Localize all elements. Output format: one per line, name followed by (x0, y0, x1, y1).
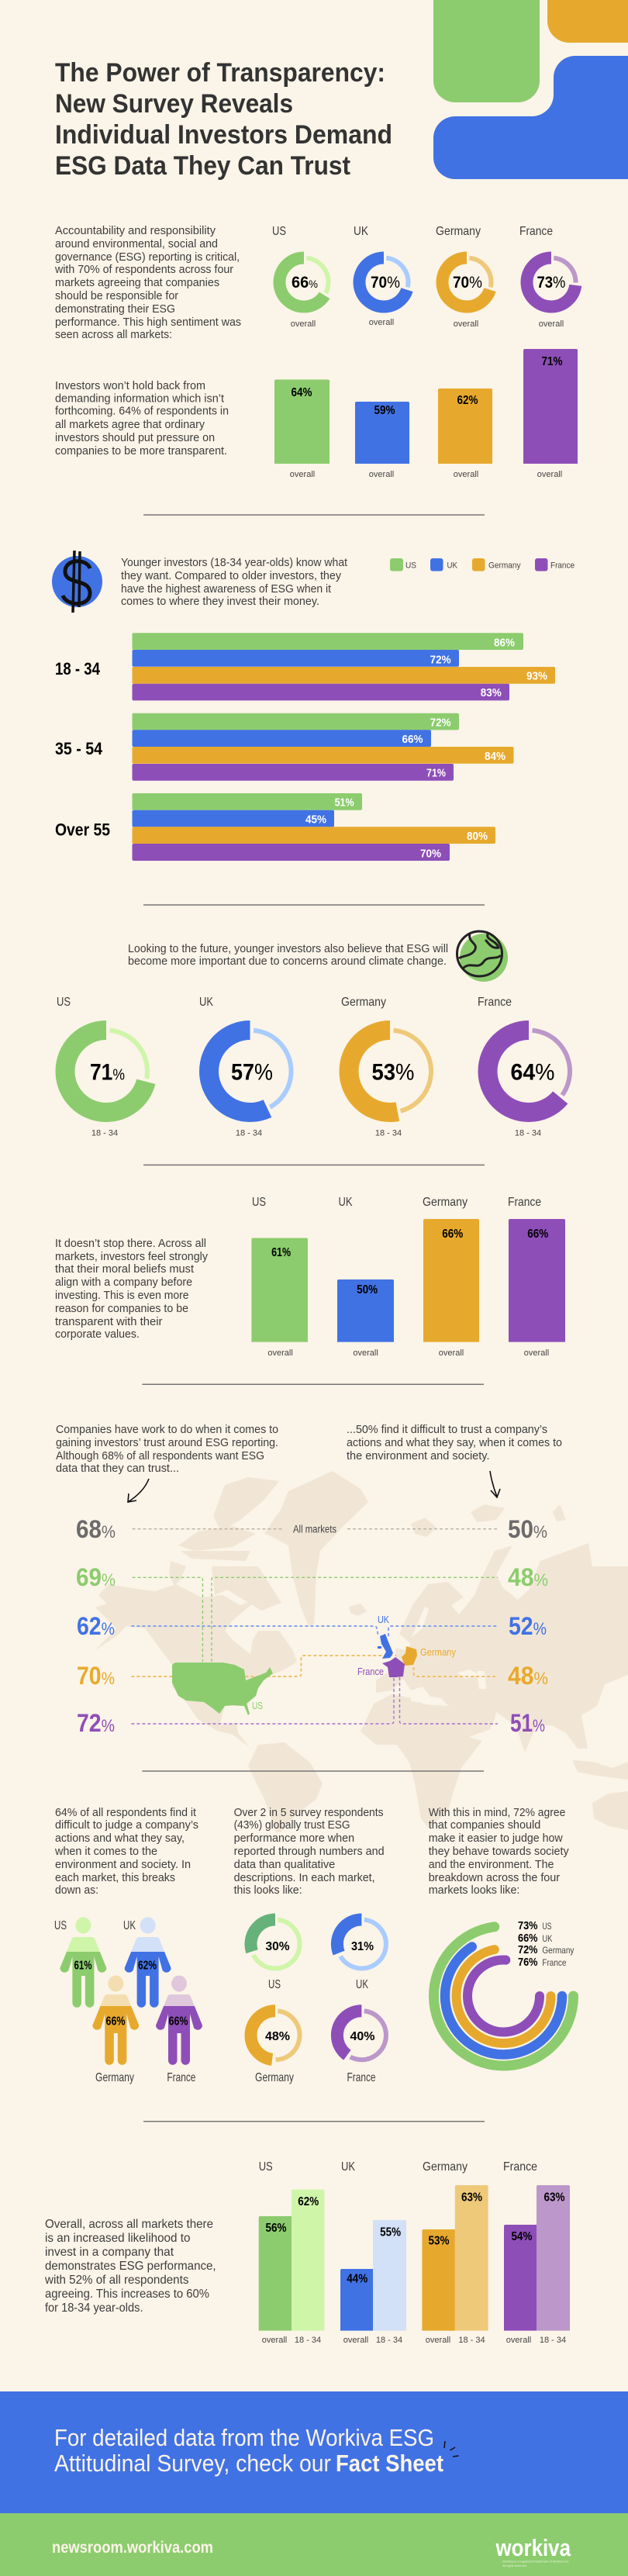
text block: likelihood to invest (44, 2218, 216, 2315)
text block: accountability: with 70% of respondents across four (54, 263, 233, 276)
text block: difficult to judge: difficult to judge a company’s (55, 1818, 198, 1832)
text block: younger investors: have the highest awareness of ESG when it (121, 582, 332, 596)
text block: accountability (54, 224, 241, 341)
icon: globe (457, 931, 508, 982)
bar chart: investors should put pressure on companies: 62% (457, 394, 478, 407)
bar chart: investors should put pressure on companies: overall (369, 470, 394, 479)
bar chart: awareness 18-34: 18 - 34 (55, 659, 101, 679)
people pictogram chart: US (54, 1919, 67, 1932)
radial bar chart: easier to judge: France (542, 1957, 567, 1968)
bar chart: moral beliefs (251, 1196, 565, 1358)
radial bar chart: easier to judge: UK (542, 1933, 552, 1944)
text block: moral beliefs: align with a company before (55, 1276, 192, 1289)
donut charts: overall responsibility: UK (354, 225, 368, 238)
text block: accountability: should be responsible for (55, 289, 178, 302)
bar chart: moral beliefs: France (508, 1196, 541, 1209)
legend: UK (447, 561, 458, 571)
text block: likelihood to invest: invest in a company that (45, 2246, 174, 2259)
text block: numbers and data: data than qualitative (234, 1858, 335, 1871)
text block: investors won't hold back: Investors won’t hold back from (55, 379, 205, 392)
text block: moral beliefs: It doesn’t stop there. Across all (55, 1237, 206, 1250)
call to action band: Attitudinal Survey, check our (54, 2450, 331, 2477)
percent column: want data they can trust (76, 1515, 116, 1737)
text block: numbers and data: this looks like: (234, 1884, 302, 1897)
footer band: newsroom.workiva.com (52, 2539, 213, 2557)
text block: younger investors: comes to where they invest their money. (121, 595, 319, 608)
text block: trust right: the environment and society. (347, 1449, 490, 1462)
bar chart: investors should put pressure on companies: overall (537, 470, 562, 479)
people pictogram chart: 66% (105, 2015, 126, 2029)
donut charts: 18-34 ESG importance: US (57, 996, 71, 1009)
people pictogram chart: Germany (95, 2071, 134, 2084)
bar chart: moral beliefs: overall (353, 1348, 378, 1358)
text block: accountability: seen across all markets: (55, 328, 172, 341)
text block: moral beliefs: that their moral beliefs must (55, 1262, 195, 1276)
text block: likelihood to invest: Overall, across all markets there (45, 2218, 213, 2231)
text block: likelihood to invest: is an increased likelihood to (45, 2232, 191, 2245)
text block: difficult to judge: down as: (55, 1884, 98, 1897)
donut charts: trust numbers and data (248, 1917, 388, 2084)
map connector lines (131, 1529, 498, 1724)
donut charts: overall responsibility: France (519, 225, 553, 238)
text block: numbers and data: performance more when (234, 1832, 354, 1845)
donut charts: overall responsibility (272, 225, 578, 329)
bar chart: awareness over 55: 51% (335, 796, 354, 810)
bar chart: likelihood to invest: overall (426, 2336, 450, 2345)
donut charts: trust numbers and data: Germany (255, 2071, 294, 2084)
text block: easier to judge: they behave towards society (429, 1845, 569, 1858)
text block: younger investors (121, 556, 348, 608)
donut charts: overall responsibility: overall (291, 319, 316, 329)
donut charts: 18-34 ESG importance: 71% (90, 1059, 125, 1086)
footer band: workiva (495, 2534, 571, 2561)
bar chart: moral beliefs: overall (267, 1348, 293, 1358)
map: US: US (252, 1700, 263, 1711)
text block: moral beliefs: transparent with their (55, 1315, 163, 1328)
text block: easier to judge: that companies should (429, 1818, 540, 1832)
radial bar chart: easier to judge: 66% (518, 1932, 538, 1945)
donut charts: trust numbers and data: France (347, 2071, 376, 2084)
people pictogram chart: France (167, 2071, 195, 2084)
bar chart: awareness 18-34: 86% (494, 636, 515, 650)
donut charts: overall responsibility: overall (539, 319, 564, 329)
percent column: want data they can trust: 69% (76, 1563, 116, 1591)
bar chart: awareness over 55 (55, 793, 495, 861)
bar chart: investors should put pressure on companies: 59% (374, 404, 395, 417)
call to action band: For detailed data from the Workiva ESG (54, 2424, 434, 2451)
legend: Germany (488, 561, 521, 571)
bar chart: likelihood to invest: overall (343, 2336, 368, 2345)
text block: easier to judge: With this in mind, 72% agree (429, 1806, 565, 1819)
percent column: want data they can trust: 62% (77, 1612, 115, 1640)
donut charts: trust numbers and data: 30% (265, 1940, 290, 1953)
text block: accountability: governance (ESG) reporting is critical, (55, 250, 240, 264)
text block: looking to the future: become more important due to concerns around climate change. (128, 955, 447, 968)
donut charts: 18-34 ESG importance (57, 996, 573, 1138)
text block: easier to judge: markets looks like: (429, 1884, 519, 1897)
percent column: difficult to trust (508, 1515, 548, 1737)
bar chart: likelihood to invest: UK (341, 2160, 355, 2174)
text block: trust left: data that they can trust... (56, 1462, 179, 1475)
call to action band (0, 2391, 628, 2513)
bar chart: awareness 35-54: 35 - 54 (55, 739, 103, 758)
donut charts: overall responsibility: US (272, 225, 286, 238)
bar chart: moral beliefs: overall (524, 1348, 549, 1358)
bar chart: likelihood to invest: 18 - 34 (540, 2336, 566, 2345)
text block: moral beliefs: reason for companies to be (55, 1302, 188, 1315)
text block: easier to judge: breakdown across the four (429, 1871, 560, 1884)
bar chart: likelihood to invest: overall (506, 2336, 531, 2345)
bar chart: investors should put pressure on companies: 71% (541, 355, 563, 368)
donut charts: 18-34 ESG importance: 18 - 34 (236, 1129, 262, 1138)
radial bar chart: easier to judge (434, 1919, 574, 2066)
donut charts: 18-34 ESG importance: Germany (341, 996, 386, 1009)
text block: investors won't hold back: demanding information which isn’t (55, 392, 225, 405)
percent column: want data they can trust: 72% (77, 1709, 115, 1737)
text block: numbers and data (234, 1806, 385, 1897)
bar chart: likelihood to invest: 63% (544, 2191, 564, 2204)
legend: France (550, 561, 575, 571)
bar chart: likelihood to invest: 56% (265, 2222, 287, 2235)
donut charts: trust numbers and data: US (268, 1978, 281, 1991)
text block: easier to judge: and the environment. The (429, 1858, 554, 1871)
donut charts: 18-34 ESG importance: 18 - 34 (515, 1129, 541, 1138)
bar chart: investors should put pressure on companies: overall (454, 470, 478, 479)
donut charts: 18-34 ESG importance: 18 - 34 (91, 1129, 118, 1138)
title: ESG Data They Can Trust (55, 151, 350, 181)
icon: dollar coin (52, 551, 102, 613)
donut charts: 18-34 ESG importance: UK (199, 996, 213, 1009)
text block: likelihood to invest: for 18-34 year-olds. (45, 2301, 143, 2315)
text block: accountability: demonstrating their ESG (55, 302, 175, 316)
title: Individual Investors Demand (55, 120, 392, 150)
footer band (0, 2513, 628, 2576)
bar chart: awareness 35-54: 71% (426, 766, 446, 780)
map: Germany (402, 1646, 456, 1666)
text block: likelihood to invest: agreeing. This increases to 60% (45, 2288, 209, 2301)
bar chart: likelihood to invest: 54% (512, 2230, 532, 2243)
bar chart: investors should put pressure on companies (274, 349, 578, 479)
legend: US (405, 561, 416, 571)
donut charts: 18-34 ESG importance: 57% (231, 1059, 273, 1086)
text block: investors won't hold back: investors should put pressure on (55, 431, 215, 444)
text block: trust left: gaining investors’ trust around ESG reporting. (56, 1436, 278, 1449)
radial bar chart: easier to judge: US (542, 1921, 551, 1932)
percent column: difficult to trust: 48% (508, 1662, 548, 1690)
text block: difficult to judge: each market, this breaks (55, 1871, 175, 1884)
label: all markets: All markets (293, 1523, 336, 1535)
title (55, 58, 392, 181)
text block: investors won't hold back: companies to be more transparent. (55, 444, 227, 458)
bar chart: awareness over 55: 80% (467, 830, 488, 843)
donut charts: overall responsibility: 66% (292, 274, 318, 292)
text block: numbers and data: Over 2 in 5 survey respondents (234, 1806, 384, 1819)
bar chart: likelihood to invest: 18 - 34 (295, 2336, 321, 2345)
map: Germany: Germany (420, 1646, 456, 1658)
bar chart: awareness 35-54 (55, 713, 513, 781)
map: UK: UK (378, 1614, 389, 1625)
donut charts: overall responsibility: overall (454, 319, 478, 329)
percent column: want data they can trust: 70% (77, 1662, 115, 1690)
donut charts: trust numbers and data: UK (356, 1978, 368, 1991)
donut charts: overall responsibility: overall (369, 318, 394, 327)
bar chart: likelihood to invest: US (259, 2160, 273, 2174)
bar chart: moral beliefs: UK (338, 1196, 353, 1209)
text block: accountability: Accountability and responsibility (55, 224, 216, 237)
text block: younger investors: Younger investors (18-34 year-olds) know what (121, 556, 348, 569)
text block: difficult to judge: environment and society. In (55, 1858, 191, 1871)
percent column: difficult to trust: 51% (510, 1709, 545, 1737)
text block: trust left: Although 68% of all respondents want ESG (56, 1449, 264, 1462)
arrow: left (128, 1479, 149, 1502)
bar chart: likelihood to invest: France (503, 2160, 537, 2174)
bar chart: likelihood to invest: 18 - 34 (458, 2336, 485, 2345)
bar chart: awareness over 55: Over 55 (55, 820, 110, 839)
text block: numbers and data: reported through numbers and (234, 1845, 385, 1858)
text block: trust right: ...50% find it difficult to trust a company’s (347, 1423, 547, 1436)
text block: likelihood to invest: with 52% of all respondents (44, 2274, 188, 2287)
percent column: difficult to trust: 52% (509, 1612, 547, 1640)
bar chart: awareness 18-34: 83% (481, 686, 502, 699)
text block: moral beliefs: corporate values. (55, 1328, 140, 1341)
radial bar chart: easier to judge: Germany (542, 1945, 574, 1956)
map: France (357, 1657, 405, 1677)
people pictogram chart: UK (123, 1919, 136, 1932)
text block: moral beliefs (55, 1237, 208, 1341)
text block: accountability: performance. This high sentiment was (55, 316, 241, 329)
donut charts: trust numbers and data: 31% (351, 1940, 374, 1953)
text block: easier to judge: make it easier to judge how (429, 1832, 563, 1845)
text block: trust left (56, 1423, 278, 1475)
bar chart: moral beliefs: overall (439, 1348, 464, 1358)
text block: looking to the future: Looking to the future, younger investors also believe that ESG will (128, 942, 448, 955)
donut charts: trust numbers and data: 40% (350, 2030, 375, 2043)
radial bar chart: easier to judge: 76% (518, 1956, 538, 1969)
text block: investors won't hold back: forthcoming. 64% of respondents in (55, 405, 229, 417)
people pictogram chart: 66% (169, 2015, 188, 2029)
donut charts: overall responsibility: 70% (371, 274, 400, 292)
bar chart: awareness over 55: 70% (420, 847, 441, 861)
bar chart: awareness 35-54: 66% (402, 733, 423, 746)
bar chart: likelihood to invest (259, 2160, 570, 2345)
bar chart: moral beliefs: US (252, 1196, 266, 1209)
text block: trust left: Companies have work to do when it comes to (56, 1423, 278, 1436)
footer band: All rights reserved. (502, 2564, 527, 2567)
bar chart: moral beliefs: 66% (442, 1228, 463, 1241)
title: New Survey Reveals (55, 89, 293, 119)
bar chart: moral beliefs: 50% (357, 1283, 378, 1297)
arrow: right (490, 1471, 500, 1497)
bar chart: likelihood to invest: 63% (461, 2191, 482, 2204)
bar chart: likelihood to invest: 62% (298, 2195, 319, 2208)
bar chart: awareness 18-34 (55, 633, 555, 700)
world map background (95, 1471, 628, 1832)
bar chart: awareness 35-54: 84% (485, 750, 506, 763)
bar chart: likelihood to invest: 53% (428, 2235, 450, 2247)
text block: numbers and data: (43%) globally trust ESG (234, 1818, 350, 1832)
people pictogram chart: 61% (74, 1959, 91, 1973)
donut charts: overall responsibility: 70% (453, 274, 482, 292)
donut charts: 18-34 ESG importance: 18 - 34 (375, 1129, 402, 1138)
donut charts: overall responsibility: Germany (436, 225, 481, 238)
text block: easier to judge (429, 1806, 569, 1897)
bar chart: moral beliefs: Germany (423, 1196, 468, 1209)
text block: difficult to judge: 64% of all respondents find it (55, 1806, 197, 1819)
text block: accountability: markets agreeing that companies (55, 276, 219, 289)
percent column: difficult to trust: 50% (508, 1515, 547, 1543)
bar chart: likelihood to invest: 44% (347, 2272, 367, 2286)
text block: younger investors: they want. Compared to older investors, they (121, 569, 341, 582)
map: US (172, 1663, 273, 1715)
people pictogram chart: 62% (138, 1959, 157, 1973)
text block: difficult to judge (54, 1806, 198, 1897)
footer band: Workiva is a registered trademark of Workiva Inc. (502, 2559, 569, 2564)
bar chart: awareness over 55: 45% (305, 813, 326, 827)
bar chart: awareness 18-34: 93% (526, 670, 547, 682)
donut charts: 18-34 ESG importance: 53% (372, 1059, 414, 1086)
bar chart: investors should put pressure on companies: 64% (292, 386, 312, 399)
bar chart: awareness 35-54: 72% (430, 717, 451, 729)
bar chart: likelihood to invest: 18 - 34 (376, 2336, 402, 2345)
people pictogram chart (54, 1917, 202, 2084)
map: France: France (357, 1666, 384, 1677)
call to action band: Fact Sheet (336, 2450, 443, 2477)
text block: trust right (347, 1423, 562, 1462)
text block: difficult to judge: actions and what they say, (55, 1832, 185, 1845)
map: UK (378, 1614, 393, 1659)
donut charts: 18-34 ESG importance: 64% (510, 1059, 555, 1086)
bar chart: likelihood to invest: Germany (423, 2160, 468, 2174)
bar chart: likelihood to invest: overall (262, 2336, 287, 2345)
percent column: difficult to trust: 48% (508, 1563, 548, 1591)
text block: investors won't hold back: all markets agree that ordinary (55, 418, 205, 431)
donut charts: overall responsibility: 73% (537, 274, 566, 292)
title: The Power of Transparency: (55, 58, 385, 88)
text block: investors won't hold back (55, 379, 229, 458)
text block: accountability: around environmental, social and (55, 237, 218, 250)
text block: looking to the future (128, 942, 448, 968)
bar chart: moral beliefs: 66% (527, 1228, 548, 1241)
donut charts: 18-34 ESG importance: France (478, 996, 512, 1009)
legend (390, 558, 575, 571)
text block: moral beliefs: investing. This is even more (55, 1289, 189, 1302)
bar chart: moral beliefs: 61% (271, 1246, 291, 1259)
text block: likelihood to invest: demonstrates ESG performance, (45, 2260, 216, 2273)
text block: numbers and data: descriptions. In each market, (234, 1871, 375, 1884)
radial bar chart: easier to judge: 73% (518, 1919, 538, 1932)
text block: moral beliefs: markets, investors feel strongly (55, 1250, 208, 1263)
decorative colour blocks (433, 0, 628, 179)
bar chart: awareness 18-34: 72% (430, 653, 451, 667)
text block: difficult to judge: when it comes to the (54, 1845, 157, 1858)
radial bar chart: easier to judge: 72% (518, 1943, 538, 1956)
bar chart: likelihood to invest: 55% (380, 2226, 401, 2239)
text block: trust right: actions and what they say, when it comes to (347, 1436, 562, 1449)
bar chart: investors should put pressure on companies: overall (290, 470, 315, 479)
percent column: want data they can trust: 68% (76, 1515, 116, 1543)
donut charts: trust numbers and data: 48% (265, 2030, 290, 2043)
